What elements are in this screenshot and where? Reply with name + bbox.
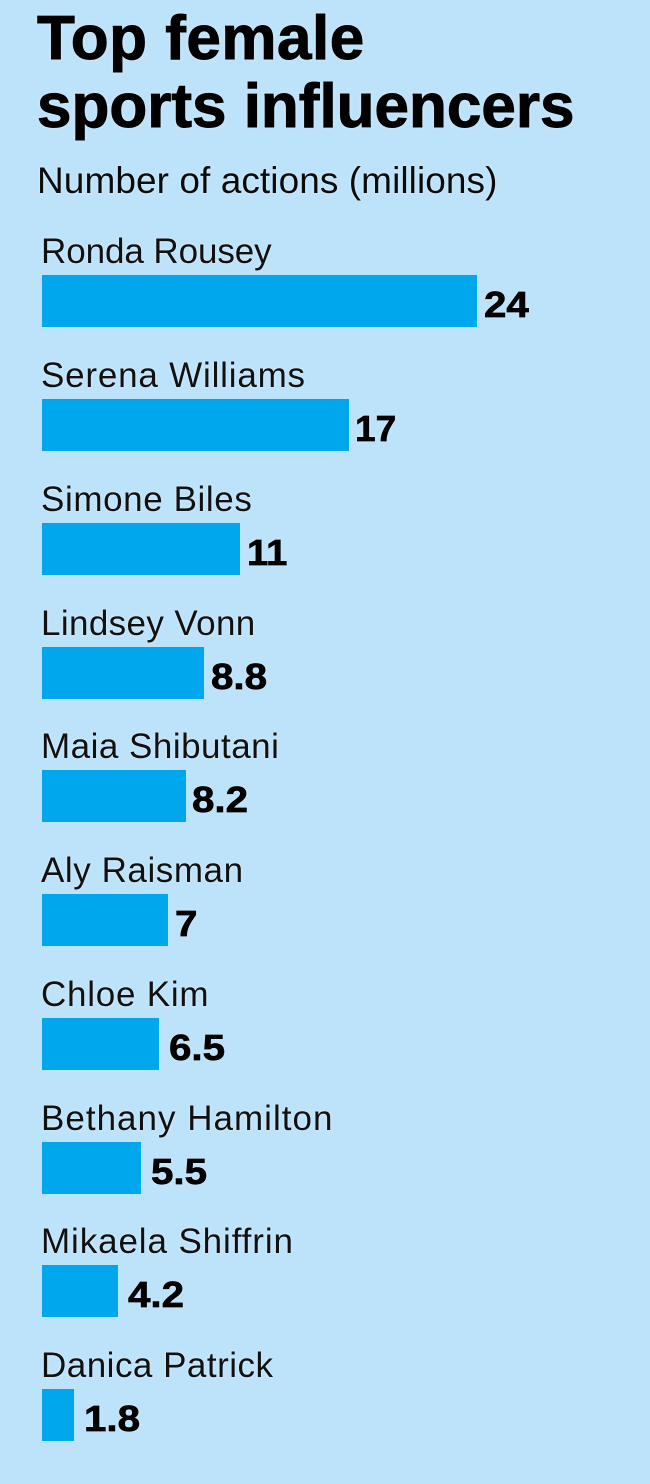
row: Aly Raisman: 7 [175,903,197,944]
title: sports influencers [37,72,574,141]
row: Serena Williams [41,356,396,451]
row: Bethany Hamilton: 5.5 [151,1151,207,1192]
row: Danica Patrick: 1.8 [84,1398,140,1439]
subtitle: Number of actions (millions) [37,160,498,201]
row: Bethany Hamilton [41,1099,333,1194]
row: Chloe Kim: 6.5 [169,1027,225,1068]
row: Mikaela Shiffrin [41,1222,294,1317]
row: Serena Williams: 17 [355,408,396,449]
row: Lindsey Vonn [41,604,267,699]
row: Aly Raisman [41,851,244,946]
row: Ronda Rousey [41,232,530,327]
title [36,4,574,141]
row: Mikaela Shiffrin: Mikaela Shiffrin [41,1222,294,1261]
row: Ronda Rousey: Ronda Rousey [41,232,272,271]
row: Ronda Rousey: 24 [484,284,529,325]
title: Top female [37,4,365,73]
row: Lindsey Vonn: Lindsey Vonn [41,604,256,643]
row: Maia Shibutani: Maia Shibutani [41,727,279,766]
row: Serena Williams: Serena Williams [41,356,306,395]
row: Maia Shibutani: 8.2 [192,779,248,820]
row: Lindsey Vonn: 8.8 [211,656,267,697]
row: Aly Raisman: Aly Raisman [41,851,244,890]
row: Maia Shibutani [41,727,279,822]
row: Chloe Kim [41,975,225,1070]
row: Simone Biles: Simone Biles [41,480,252,519]
row: Danica Patrick: Danica Patrick [41,1346,274,1385]
row: Chloe Kim: Chloe Kim [41,975,209,1014]
row: Mikaela Shiffrin: 4.2 [128,1274,184,1315]
row: Danica Patrick [41,1346,274,1441]
row: Bethany Hamilton: Bethany Hamilton [41,1099,333,1138]
row: Simone Biles: 11 [247,532,287,573]
row: Simone Biles [41,480,287,575]
